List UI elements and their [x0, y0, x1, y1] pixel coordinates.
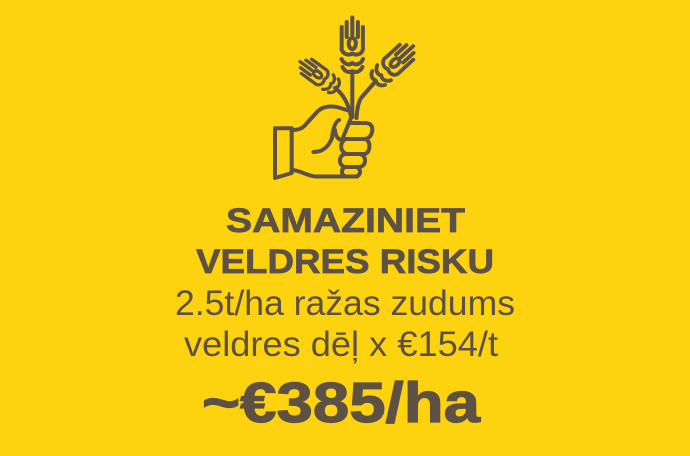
icon: cuff	[275, 128, 292, 178]
calculation line 1: 2.5t/ha ražas zudums	[175, 284, 515, 323]
result value: ~€385/ha	[202, 371, 481, 435]
icon: hand	[292, 107, 372, 176]
icon: stems	[335, 72, 375, 118]
icon: right wheat ear	[368, 39, 420, 88]
icon: hand holding three wheat ears	[275, 18, 420, 178]
heading	[196, 202, 494, 281]
heading line 1: SAMAZINIET	[226, 202, 465, 240]
icon: centre wheat ear	[342, 18, 363, 72]
calculation line 2: veldres dēļ x €154/t	[184, 325, 498, 364]
calculation text	[175, 284, 515, 364]
icon: left wheat ear	[295, 55, 342, 96]
heading line 2: VELDRES RISKU	[196, 243, 494, 281]
